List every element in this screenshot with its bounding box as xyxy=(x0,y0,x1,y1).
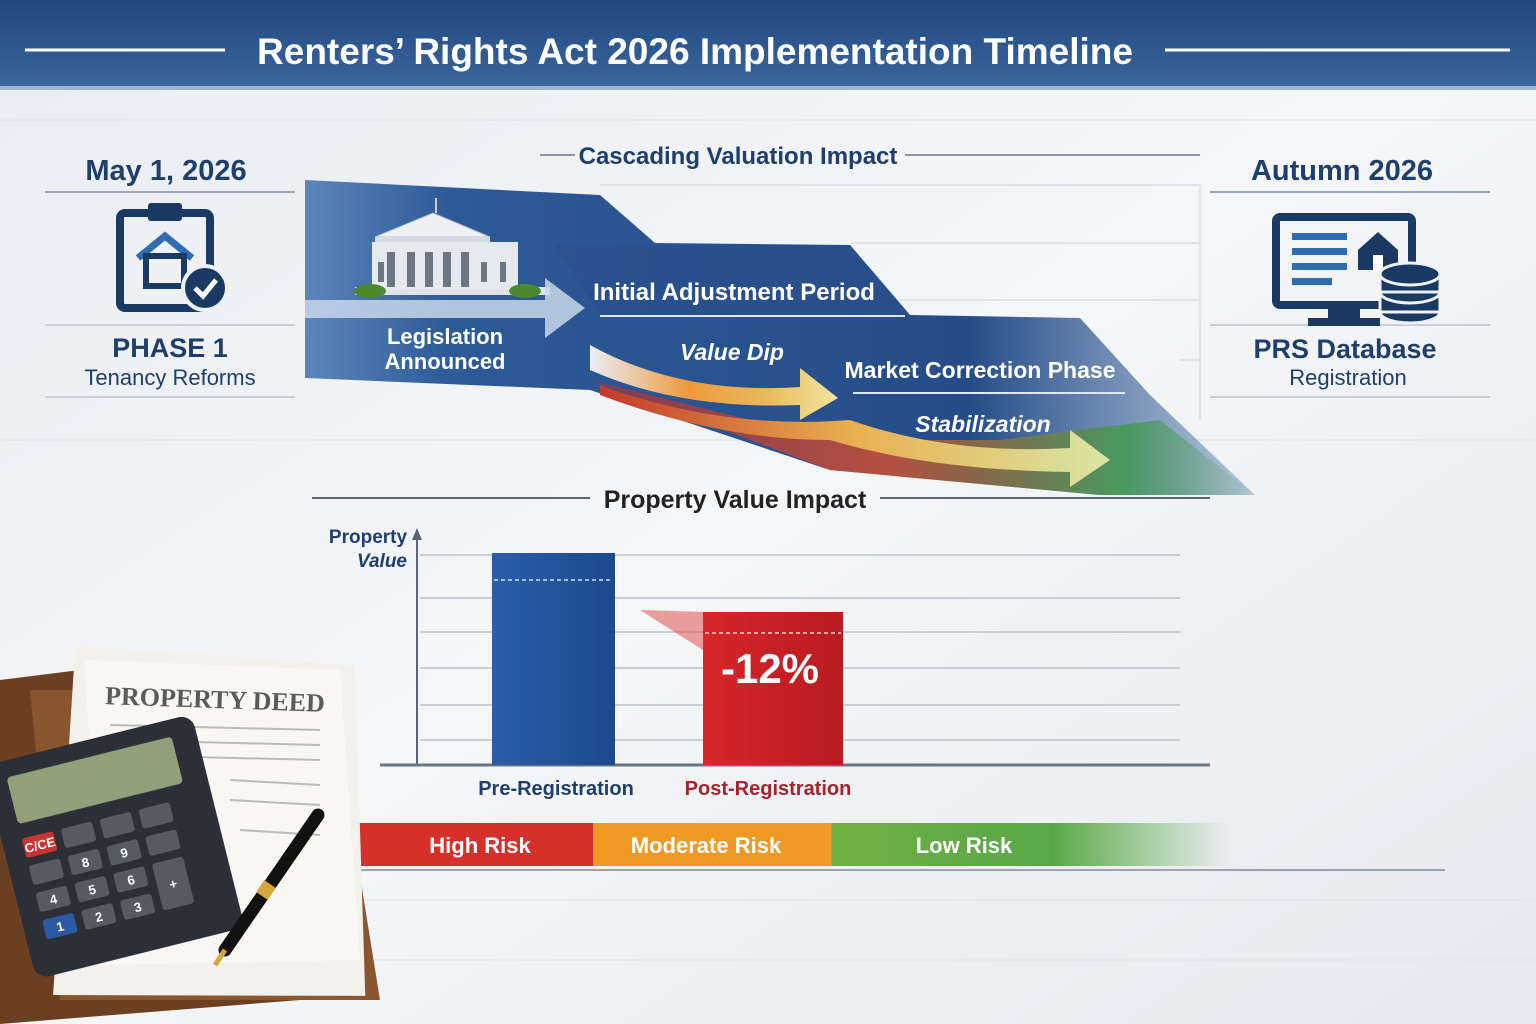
chart: cascading blue bands xyxy=(305,180,1255,495)
bar chart: property value: Value xyxy=(357,551,407,572)
risk bar: Low Risk xyxy=(916,833,1013,858)
panel: Autumn 2026 PRS database: PRS Database xyxy=(1253,334,1437,364)
icon: calculator: 8 xyxy=(80,854,91,871)
panel: Autumn 2026 PRS database: Autumn 2026 xyxy=(1251,155,1433,187)
icon: calculator: 4 xyxy=(48,891,59,908)
icon: calculator: 6 xyxy=(126,872,136,888)
bar chart: property value xyxy=(329,527,1210,800)
risk bar: Moderate Risk xyxy=(631,833,782,858)
risk bar xyxy=(345,823,1445,870)
heading: property value impact: Property Value Impact xyxy=(604,486,867,514)
icon: pen xyxy=(215,815,318,965)
risk bar: High Risk xyxy=(429,833,531,858)
icon: monitor with database xyxy=(1276,217,1440,326)
icon: clipboard with house and check xyxy=(120,203,227,310)
panel: May 1 2026 phase 1: Tenancy Reforms xyxy=(84,365,256,390)
icon: calculator: + xyxy=(168,876,179,892)
illustration: property deed, calculator and pen: PROPERTY DEED xyxy=(105,681,325,718)
icon: calculator xyxy=(0,714,245,979)
bar chart: property value: Property xyxy=(329,527,407,548)
panel: May 1 2026 phase 1: May 1, 2026 xyxy=(85,155,247,187)
arrow: stabilization xyxy=(600,385,1110,487)
bar chart: property value: Pre-Registration xyxy=(478,778,634,800)
icon: calculator: 1 xyxy=(55,918,65,935)
heading: cascading valuation impact: Cascading Valuation Impact xyxy=(579,143,897,170)
bar: pre-registration xyxy=(492,553,615,765)
chart: cascading blue bands: Value Dip xyxy=(680,339,784,365)
chart: cascading blue bands: Legislation xyxy=(387,324,503,349)
icon: calculator: 3 xyxy=(132,899,143,915)
panel: May 1 2026 phase 1 xyxy=(45,155,295,397)
illustration: property deed, calculator and pen xyxy=(0,645,380,1024)
icon: calculator: 5 xyxy=(87,882,98,898)
chart: cascading blue bands: Market Correction Phase xyxy=(845,357,1115,383)
panel: Autumn 2026 PRS database: Registration xyxy=(1289,365,1407,390)
title: Renters’ Rights Act 2026 Implementation Timeline xyxy=(257,31,1133,72)
icon: government building xyxy=(354,198,550,298)
panel: May 1 2026 phase 1: PHASE 1 xyxy=(112,333,228,363)
chart: cascading blue bands: Stabilization xyxy=(915,411,1051,437)
icon: calculator: 9 xyxy=(119,845,130,861)
header banner xyxy=(0,0,1536,90)
icon: calculator: 2 xyxy=(94,909,104,925)
bar chart: property value: Post-Registration xyxy=(685,778,851,800)
bar: post-registration xyxy=(640,610,843,765)
chart: cascading blue bands: Announced xyxy=(384,349,506,374)
panel: Autumn 2026 PRS database xyxy=(1210,155,1490,397)
chart: cascading blue bands: Initial Adjustment Period xyxy=(593,279,875,306)
icon: calculator: C/CE xyxy=(23,834,57,856)
arrow: legislation to initial adjustment xyxy=(305,278,585,338)
arrow: value dip xyxy=(590,345,838,420)
bar: post-registration: -12% xyxy=(721,645,819,692)
